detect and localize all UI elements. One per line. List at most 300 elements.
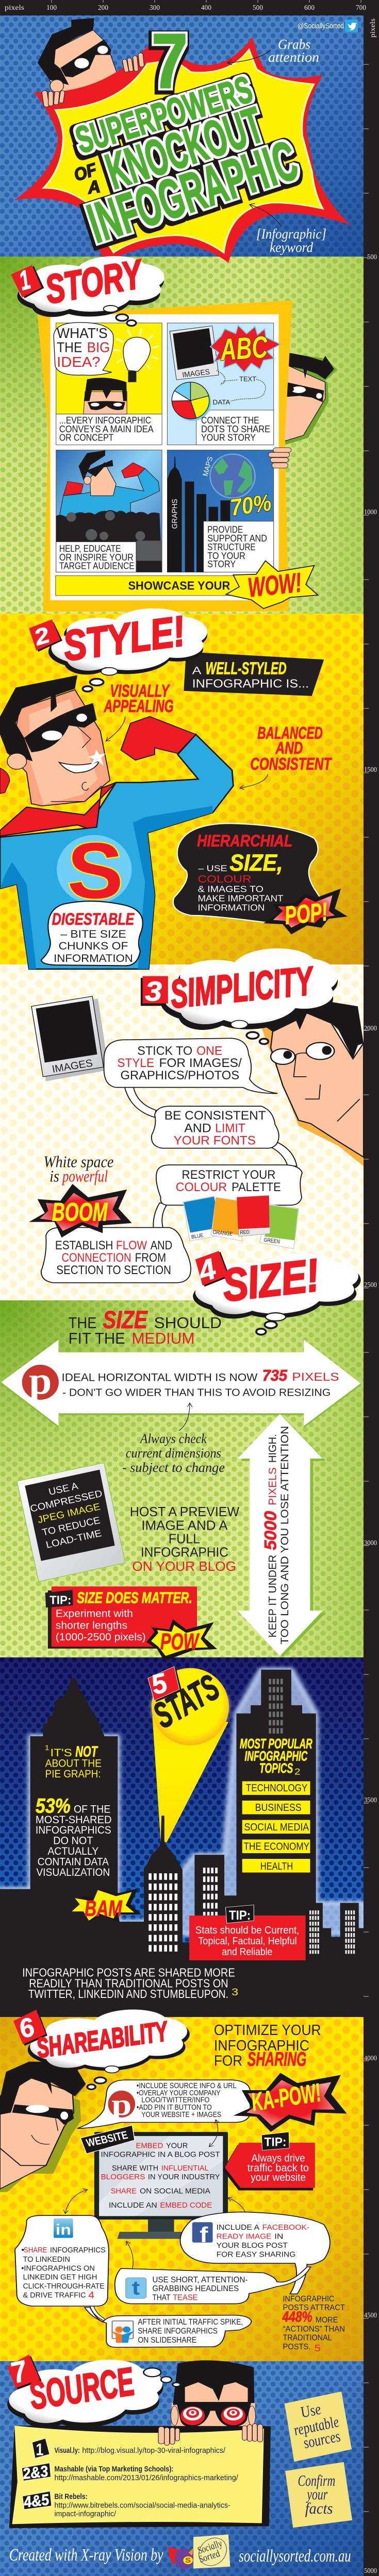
text: not about pie graph: IT'S	[51, 1747, 72, 1758]
pixel ruler: top and right: 300	[150, 4, 160, 12]
stat: 448% more actions: INFOGRAPHIC	[283, 2295, 334, 2303]
icon: twitter	[126, 2277, 146, 2299]
sticky note: reputable sources	[285, 2392, 352, 2462]
tip: drive traffic: traffic back to	[248, 2162, 309, 2174]
bubble: slideshare: ON SLIDESHARE	[138, 2336, 196, 2345]
globe	[209, 453, 256, 499]
bubble: be consistent	[152, 1106, 279, 1148]
tip: drive traffic: TIP:	[264, 2135, 287, 2149]
panel: 2 style	[0, 607, 348, 969]
flexing hero	[59, 450, 159, 517]
tip: stats	[189, 1905, 306, 1960]
callout: visually appealing	[104, 682, 174, 741]
pixel ruler: top and right: 400	[201, 4, 211, 12]
heading: size: 4	[193, 1252, 220, 1288]
burst: boom	[29, 1184, 131, 1238]
bubble: slideshare	[85, 2307, 252, 2347]
bubble: pinterest tips: •INCLUDE SOURCE INFO & URL	[137, 2081, 236, 2090]
comic panel: provide support: GRAPHS	[171, 499, 179, 529]
bubble: stick to one style: GRAPHICS/PHOTOS	[120, 1069, 239, 1082]
connector bubble tails	[124, 1087, 297, 1229]
crowd silhouette	[56, 510, 162, 572]
yellow source card	[9, 2424, 271, 2528]
comic panel: help, educate	[56, 450, 162, 572]
burst: WOW	[226, 561, 318, 608]
headline: optimize: FOR	[214, 2053, 242, 2069]
icon: superbird: S	[185, 2556, 191, 2565]
callout: grabs attention: Grabs	[278, 37, 310, 52]
text: not about pie graph: VISUALIZATION	[36, 1866, 110, 1878]
source 1: Visual.ly:	[54, 2446, 80, 2454]
heading: stats: STATS	[146, 1667, 226, 1736]
heading cloud: source: SOURCE	[25, 2360, 139, 2418]
text: posts shared more readily: TWITTER, LINKEDIN AND STUMBLEUPON.	[28, 1988, 228, 2001]
text: not about pie graph: 1	[45, 1744, 50, 1752]
headline: optimize: OPTIMIZE YOUR	[214, 2022, 321, 2039]
dotted connectors	[217, 370, 266, 401]
icon: pinterest: p	[111, 2088, 131, 2122]
note: always check: Always check	[139, 1431, 207, 1446]
polaroid: compressed jpeg: TO REDUCE	[41, 1515, 101, 1538]
bubble: linkedin: INFOGRAPHICS	[50, 2246, 106, 2255]
note: always check: current dimensions	[126, 1446, 221, 1461]
pixel ruler: top and right: 5000	[364, 2567, 377, 2575]
text: host a preview: ON YOUR BLOG	[132, 1559, 236, 1574]
list: most popular topics: SOCIAL MEDIA	[244, 1821, 309, 1833]
burst: bam	[72, 1889, 141, 1923]
bubble: establish flow: CONNECTION	[62, 1251, 131, 1265]
text: not about pie graph: CONTAIN DATA	[38, 1855, 109, 1868]
heading cloud: style	[29, 607, 207, 691]
hero with target glasses	[171, 2360, 256, 2431]
tip: drive traffic	[223, 2132, 315, 2191]
showcase strip	[56, 561, 318, 608]
tip: drive traffic: Always drive	[252, 2152, 305, 2164]
pixel ruler: top and right: 500	[367, 253, 377, 261]
source 4 and 5: 4&5	[22, 2492, 51, 2511]
panel: 7 source	[7, 2354, 352, 2569]
headline: the size should fit the medium: SHOULD	[154, 1314, 222, 1332]
pixel ruler: top and right: 2500	[364, 1281, 377, 1289]
sticky note: confirm your facts: Confirm	[298, 2472, 335, 2489]
arrows between channels	[65, 2120, 248, 2277]
bubble: stick to one style: ONE	[196, 1044, 222, 1058]
stat: 448% more actions: POSTS ATTRACT	[283, 2303, 345, 2312]
arrow: vertical height: TOO LONG AND YOU LOSE ATTENTION	[278, 1426, 291, 1645]
panel: 1 story	[11, 251, 337, 612]
bubble: facebook: YOUR BLOG POST	[217, 2241, 288, 2250]
comic panel: big idea: THE	[57, 340, 82, 355]
title words: SUPERPOWERS	[71, 69, 257, 161]
label: well-styled: A	[192, 664, 202, 676]
icon: pinterest: p	[29, 1359, 52, 1402]
arrow: vertical height: KEEP IT UNDER	[267, 1555, 278, 1637]
list: most popular topics: MOST POPULAR	[240, 1736, 312, 1752]
burst: WOW: WOW!	[246, 568, 303, 603]
heading: size: SIZE!	[219, 1249, 322, 1311]
tip: size does matter: (1000-2500 pixels)	[56, 1632, 146, 1643]
sticky note: confirm your facts	[285, 2462, 352, 2528]
title words: 7	[152, 18, 188, 104]
stat: 448% more actions: POSTS.	[283, 2343, 310, 2351]
comic panel: help, educate: OR INSPIRE YOUR	[59, 552, 134, 563]
polaroid: compressed jpeg: COMPRESSED	[29, 1488, 104, 1515]
pixel ruler: top and right: 100	[46, 4, 57, 12]
tip: size does matter	[45, 1586, 197, 1649]
bubble: hierarchial: COLOUR	[197, 874, 252, 885]
hero glove	[121, 717, 196, 760]
burst: boom: BOOM	[52, 1198, 108, 1227]
monitor: ON SOCIAL MEDIA	[140, 2187, 210, 2195]
list: most popular topics: INFOGRAPHIC	[244, 1749, 308, 1764]
bubble: twitter: GRABBING HEADLINES	[152, 2284, 239, 2293]
list: most popular topics: BUSINESS	[255, 1802, 302, 1814]
icon: polaroid images: IMAGES	[51, 1057, 94, 1075]
text: not about pie graph: INFOGRAPHICS	[36, 1824, 111, 1836]
bubble: linkedin	[15, 2215, 109, 2323]
connected speech bubbles	[41, 1038, 302, 1283]
label: well-styled: WELL-STYLED	[205, 659, 287, 678]
headline: the size should fit the medium: MEDIUM	[131, 1330, 194, 1347]
bubble: hierarchial: INFORMATION	[197, 903, 265, 912]
stat: 448% more actions: MORE	[316, 2316, 338, 2324]
monitor: INFLUENTIAL	[161, 2164, 209, 2173]
tip: size does matter: TIP:	[50, 1594, 71, 1607]
arrow: vertical height	[238, 1414, 325, 1657]
hero head	[84, 378, 127, 414]
bubble: linkedin: TO LINKEDIN	[23, 2255, 70, 2264]
text: not about pie graph: ACTUALLY	[47, 1845, 99, 1857]
arrow: vertical height: HIGH.	[267, 1434, 278, 1463]
comic panel: provide support: 70%	[228, 489, 273, 521]
bubble: linkedin: CLICK-THROUGH-RATE	[23, 2282, 105, 2291]
sticky note: reputable sources: reputable	[291, 2413, 341, 2439]
bubble: restrict colour palette: PALETTE	[232, 1180, 281, 1194]
bubble: linkedin: LINKEDIN GET HIGH	[23, 2273, 97, 2281]
tip: drive traffic: your website	[251, 2172, 306, 2183]
bubble: be consistent: LIMIT	[215, 1121, 245, 1135]
pixel ruler: top and right: 4000	[364, 2055, 377, 2062]
burst: ka-pow	[233, 2073, 347, 2132]
bubble: be consistent: BE CONSISTENT	[164, 1109, 266, 1123]
pixel ruler: top and right: 700	[356, 4, 366, 12]
text: host a preview: INFOGRAPHIC	[141, 1545, 228, 1560]
bubble: slideshare: SHARE INFOGRAPHICS	[138, 2327, 218, 2335]
pixel ruler: top and right: 200	[98, 4, 108, 12]
bubble: facebook: FOR EASY SHARING	[217, 2250, 295, 2259]
bubble: facebook: INCLUDE A	[217, 2223, 259, 2232]
number badge: 5: 5	[147, 1668, 172, 1700]
heading cloud: size	[193, 1253, 361, 1321]
source 2 and 3: Mashable (via Top Marketing Schools):	[54, 2465, 174, 2473]
polaroid: compressed jpeg: LOAD-TIME	[45, 1528, 103, 1551]
source 4 and 5: Bit Rebels:	[54, 2493, 88, 2501]
icon: linkedin	[54, 2218, 73, 2238]
source 2 and 3: 2&3	[21, 2463, 50, 2483]
callout: balanced and consistent: AND	[275, 739, 303, 758]
panel: 6 shareability	[0, 2009, 347, 2323]
title words: OF	[72, 160, 100, 185]
sticky note: confirm your facts: facts	[305, 2500, 333, 2517]
source 2 and 3	[21, 2463, 238, 2483]
comic panel: connect the dots: YOUR STORY	[201, 432, 256, 443]
bubble: establish flow: AND	[151, 1239, 172, 1252]
source 2 and 3: http://mashable.com/2013/01/26/infographics-marketing/	[54, 2474, 238, 2482]
monitor: SHARE	[111, 2187, 137, 2195]
bubble: establish flow	[41, 1228, 191, 1283]
tip: size does matter: Experiment with	[56, 1608, 133, 1619]
bubble: facebook: READY IMAGE	[217, 2232, 271, 2241]
bubble: hierarchial	[173, 823, 322, 924]
bubble: hierarchial: SIZE,	[229, 850, 283, 876]
bubble: facebook: IN	[274, 2232, 283, 2241]
arrow: annotation	[179, 1403, 190, 1431]
sticky note: reputable sources: Use	[298, 2400, 323, 2421]
burst: pop	[263, 889, 348, 935]
bubble: be consistent: YOUR FONTS	[174, 1133, 256, 1147]
label: well-styled	[184, 652, 324, 696]
hero fingers	[158, 2424, 263, 2445]
comic panel: big idea: WHAT'S	[57, 325, 108, 341]
bubble: stick to one style: STYLE	[117, 1056, 154, 1070]
comic panel: help, educate: HELP, EDUCATE	[59, 543, 121, 554]
tip: stats: TIP:	[229, 1908, 251, 1922]
text: host a preview: IMAGE AND A	[141, 1518, 228, 1533]
red and yellow comic burst	[14, 37, 351, 263]
title words	[71, 18, 305, 255]
polaroid: compressed jpeg: JPEG IMAGE	[37, 1502, 102, 1526]
skyline	[0, 1670, 364, 1968]
comic panel: provide support: TO YOUR	[207, 550, 245, 561]
heading cloud: source	[7, 2354, 180, 2428]
heading cloud: style: STYLE!	[60, 607, 188, 670]
callout: infographic keyword	[250, 205, 326, 255]
twitter handle	[298, 20, 358, 32]
comic panel: big idea: CONVEYS A MAIN IDEA	[59, 423, 154, 434]
tip: stats: Topical, Factual, Helpful	[198, 1935, 297, 1947]
heading cloud: simplicity: 3	[145, 975, 162, 1007]
bubble: restrict colour palette	[156, 1165, 302, 1205]
list: most popular topics: THE ECONOMY	[244, 1840, 309, 1852]
hero	[0, 2062, 86, 2192]
heading cloud: source: 7	[7, 2354, 33, 2389]
note: always check	[122, 1431, 225, 1475]
polaroid	[170, 326, 219, 380]
showcase strip: SHOWCASE YOUR	[128, 579, 230, 592]
heading cloud: simplicity	[141, 948, 338, 1044]
bubble: pinterest tips: •OVERLAY YOUR COMPANY	[137, 2089, 221, 2097]
hero body: S	[67, 826, 123, 915]
bubble: pinterest tips	[77, 2080, 250, 2128]
burst: ABC: ABC	[219, 329, 269, 367]
label: website	[80, 2125, 135, 2154]
comic panel: provide support: STRUCTURE	[207, 541, 256, 552]
burst: pow	[146, 1619, 217, 1661]
callout: grabs attention	[227, 37, 319, 65]
pixel ruler: top and right: 2000	[364, 1025, 377, 1032]
panel: 5 stats	[0, 1667, 364, 1968]
bubble: be consistent: AND	[184, 1121, 211, 1135]
bubble: linkedin: •	[21, 2246, 25, 2255]
pixel ruler: top and right: pixels	[369, 19, 377, 38]
spotlight beam	[152, 1668, 229, 1842]
text: host a preview: FULL	[169, 1531, 200, 1546]
monitor: SHARE WITH	[112, 2164, 158, 2173]
callout: balanced and consistent: BALANCED	[257, 724, 323, 743]
colour swatches	[183, 1196, 299, 1249]
text: not about pie graph: ABOUT THE	[45, 1757, 102, 1769]
pixel ruler: top and right: 1500	[364, 766, 377, 774]
source 4 and 5	[22, 2492, 230, 2518]
icon: slideshare	[111, 2321, 134, 2343]
logo: socially sorted note: Sorted	[196, 2548, 222, 2565]
comic panel: help, educate: TARGET AUDIENCE	[59, 561, 135, 571]
bubble: digestable: CHUNKS OF	[58, 940, 128, 952]
icon: linkedin: in	[56, 2222, 71, 2238]
pixel ruler: top and right: 600	[304, 4, 315, 12]
footer credit: Created with X-ray Vision by	[9, 2546, 163, 2565]
bubble: establish flow: FLOW	[116, 1239, 147, 1252]
arrow: vertical height: 5000	[261, 1511, 280, 1550]
bubble: slideshare: AFTER INITIAL TRAFFIC SPIKE,	[138, 2318, 243, 2327]
bubble: linkedin: SHARE	[24, 2246, 47, 2255]
text: not about pie graph: MOST-SHARED	[36, 1814, 112, 1826]
comic panel: provide support: PROVIDE	[207, 524, 243, 535]
callout: balanced and consistent: CONSISTENT	[250, 755, 332, 774]
footer credit	[9, 2534, 351, 2569]
colour swatches: RED	[240, 1229, 250, 1235]
polaroid: compressed jpeg: USE A	[47, 1481, 79, 1498]
callout: balanced and consistent	[240, 724, 332, 788]
note: white space is powerful: powerful	[61, 1168, 108, 1185]
source 4 and 5: impact-infographic/	[54, 2510, 116, 2518]
source 1	[32, 2438, 225, 2459]
bubble: establish flow: ESTABLISH	[55, 1239, 113, 1252]
bubble: twitter: USE SHORT, ATTENTION-	[152, 2275, 248, 2284]
tip: size does matter: SIZE DOES MATTER.	[77, 1589, 192, 1606]
pixel ruler: top and right: 4500	[364, 2312, 377, 2319]
callout: visually appealing: APPEALING	[104, 697, 174, 716]
logo: socially sorted note: Socially	[195, 2538, 224, 2556]
text: not about pie graph: NOT	[75, 1743, 98, 1760]
heading: size	[193, 1249, 322, 1311]
hero fingers over burst	[42, 53, 144, 107]
bubble: pinterest tips: LOGO/TWITTER/INFO	[141, 2096, 210, 2104]
comic panel: provide support: SUPPORT AND	[207, 533, 267, 544]
list: most popular topics	[240, 1736, 312, 1873]
comic panel: connect the dots: DOTS TO SHARE	[201, 423, 270, 434]
heading cloud: shareability	[13, 2009, 190, 2089]
bar chart city	[167, 456, 230, 572]
tip: size does matter: shorter lengths	[56, 1620, 127, 1631]
comic panel: big idea	[54, 323, 162, 445]
bubble: linkedin: 4	[88, 2291, 94, 2301]
arrow: horizontal width: 735	[262, 1367, 288, 1384]
hero body	[0, 735, 233, 969]
list: most popular topics: TOPICS	[259, 1760, 293, 1776]
monitor: YOUR	[166, 2142, 188, 2150]
bubble: pinterest tips: YOUR WEBSITE + IMAGES	[141, 2110, 221, 2119]
bubble: hierarchial: & IMAGES TO	[197, 884, 263, 894]
bubble: hierarchial: MAKE IMPORTANT	[197, 893, 283, 903]
note: white space is powerful: is	[50, 1168, 59, 1185]
logo: socially sorted note	[193, 2534, 231, 2569]
bubble: twitter: TEASE	[173, 2293, 197, 2302]
icon: light bulb	[113, 328, 159, 382]
list: most popular topics: HEALTH	[260, 1860, 293, 1872]
burst: pop: POP!	[283, 897, 329, 930]
headline: the size should fit the medium	[69, 1306, 222, 1347]
bubble: restrict colour palette: RESTRICT YOUR	[182, 1168, 275, 1182]
source 4 and 5: http://www.bitrebels.com/social/social-media-analytics-	[54, 2501, 230, 2510]
colour swatches: BLUE	[191, 1232, 204, 1240]
note: white space is powerful	[43, 1154, 113, 1185]
bubble: digestable	[41, 901, 143, 965]
icon: superbird	[168, 2547, 194, 2569]
text: posts shared more readily: READILY THAN TRADITIONAL POSTS ON	[29, 1977, 228, 1990]
panel: title header	[14, 18, 358, 263]
bubble: restrict colour palette: COLOUR	[176, 1180, 227, 1194]
burst: ABC	[210, 326, 281, 372]
masked hero peeking from behind burst	[38, 18, 120, 99]
stat: 448% more actions: “ACTIONS” THAN	[283, 2325, 345, 2333]
bubble: stick to one style: FOR IMAGES/	[159, 1056, 242, 1070]
text: posts shared more readily: 3	[232, 1986, 238, 1998]
text: host a preview: HOST A PREVIEW	[130, 1504, 239, 1519]
hero with glasses	[260, 995, 364, 1166]
icon: polaroid images	[31, 996, 109, 1081]
list: most popular topics: 2	[294, 1767, 300, 1777]
stat: 448% more actions	[282, 2295, 345, 2353]
bubble: digestable: INFORMATION	[54, 952, 133, 964]
tip: stats: Stats should be Current,	[195, 1924, 299, 1936]
callout: grabs attention: attention	[268, 49, 319, 65]
bubble: hierarchial: – USE	[198, 863, 227, 873]
stat: 448% more actions: TRADITIONAL	[283, 2333, 332, 2342]
bubble: stick to one style	[104, 1038, 277, 1093]
source 1: 1	[36, 2440, 43, 2459]
tip: stats: and Reliable	[222, 1946, 272, 1958]
callout: visually appealing: VISUALLY	[110, 682, 171, 701]
polaroid: IMAGES	[182, 368, 210, 379]
comic panel: big idea: IDEA?	[57, 354, 101, 370]
bubble: digestable: DIGESTABLE	[52, 910, 135, 929]
callout: infographic keyword: keyword	[270, 240, 313, 255]
note: white space is powerful: White space	[43, 1154, 113, 1171]
monitor: EMBED CODE	[160, 2201, 212, 2209]
monitor: INCLUDE AN	[109, 2201, 157, 2209]
heading cloud: shareability: SHAREABILITY	[34, 2016, 171, 2063]
comic panel: connect the dots: CONNECT THE	[201, 415, 259, 426]
colour swatches: ORANGE	[212, 1229, 233, 1237]
icon: facebook: f	[200, 2223, 208, 2247]
monitor: BLOGGERS	[101, 2173, 145, 2181]
text: not about pie graph: DO NOT	[53, 1834, 93, 1846]
burst: bam: BAM	[85, 1896, 123, 1921]
colour swatches: GREEN	[263, 1237, 281, 1245]
pixel ruler: top and right: 3000	[364, 1539, 377, 1547]
icon: facebook	[192, 2222, 213, 2247]
comic page	[51, 314, 279, 600]
twitter handle: @SociallySorted	[298, 22, 344, 30]
bubble: digestable: – BITE SIZE	[60, 928, 126, 940]
pixel ruler: top and right: 500	[253, 4, 263, 12]
text: not about pie graph: PIE GRAPH:	[45, 1768, 101, 1780]
comic panel: big idea: ...EVERY INFOGRAPHIC	[59, 415, 151, 426]
monitor: EMBED	[136, 2142, 163, 2150]
label: website: WEBSITE	[85, 2129, 129, 2149]
bubble: facebook	[180, 2212, 330, 2294]
